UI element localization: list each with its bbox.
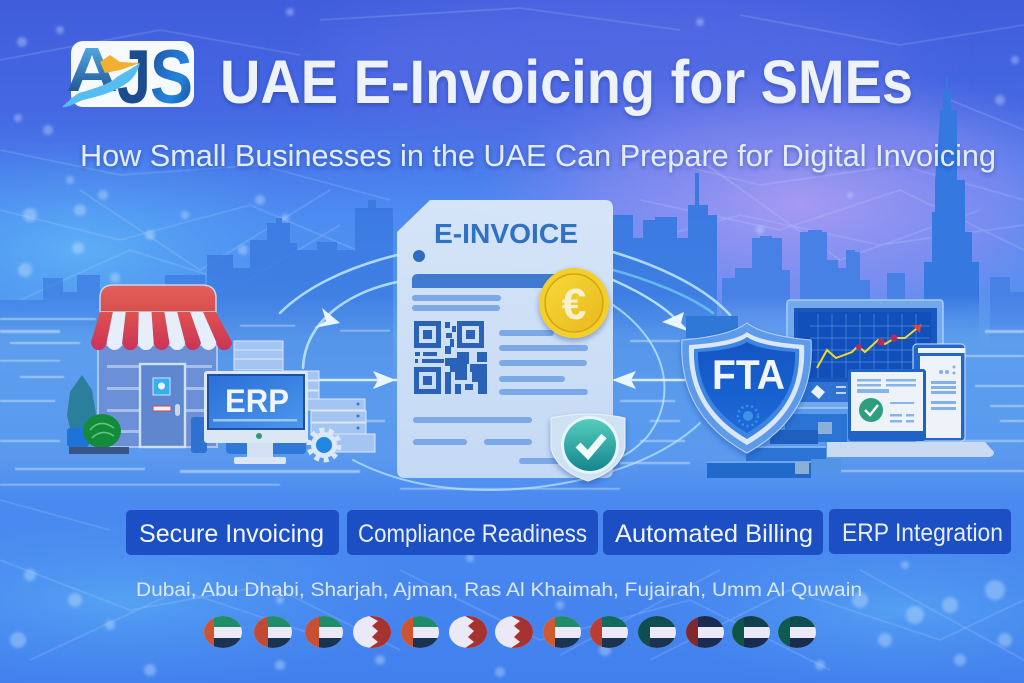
- ERP label: ERP: [225, 383, 289, 419]
- FTA shield: [682, 323, 811, 453]
- laptop base: [827, 442, 994, 457]
- flag row: [204, 616, 816, 648]
- water and ground band: [0, 295, 1024, 500]
- FTA label: FTA: [712, 351, 785, 398]
- tablet: [848, 369, 926, 441]
- button: compliance readiness: [347, 510, 598, 555]
- invoice heading: E-INVOICE: [434, 218, 578, 249]
- flag 1: [204, 616, 242, 648]
- flag 7: [495, 616, 533, 648]
- title: UAE E-Invoicing for SMEs: [220, 48, 913, 116]
- trend line: [817, 325, 921, 368]
- small server behind shield: [686, 316, 738, 338]
- feature buttons: [126, 509, 1011, 555]
- button: ERP integration: ERP Integration: [842, 519, 1003, 547]
- logo letters: AJS: S: [150, 35, 193, 120]
- logo: [62, 35, 194, 120]
- flag 8: [543, 616, 581, 648]
- QR code: [414, 321, 487, 394]
- flag 5: [401, 616, 439, 648]
- flag 3: [305, 616, 343, 648]
- city skyline: [0, 77, 1024, 420]
- large monitor: [787, 300, 943, 408]
- store icon: [67, 285, 232, 454]
- awning stripes: [91, 312, 232, 350]
- invoice document: [397, 200, 613, 478]
- store body: [98, 345, 217, 447]
- round green shrub: [83, 414, 121, 448]
- button: automated billing: [603, 510, 823, 555]
- check shield: [551, 414, 625, 481]
- flag 10: [638, 616, 676, 648]
- ERP monitor: [204, 371, 308, 464]
- logo letters: AJS: J: [117, 35, 151, 120]
- ERP server stacks: [191, 341, 375, 454]
- flag 13: [778, 616, 816, 648]
- store door: [140, 364, 185, 447]
- invoice text lines: [412, 274, 588, 464]
- subtitle: How Small Businesses in the UAE Can Prepare for Digital Invoicing: [80, 138, 996, 173]
- awning roof: [100, 285, 216, 312]
- devices group: [686, 300, 994, 478]
- euro symbol: €: [562, 280, 586, 329]
- flag 6: [449, 616, 487, 648]
- phone: [913, 344, 965, 441]
- server racks: [707, 414, 847, 478]
- emirates list: Dubai, Abu Dhabi, Sharjah, Ajman, Ras Al Khaimah, Fujairah, Umm Al Quwain: [136, 580, 862, 601]
- logo letters: AJS: A: [66, 36, 118, 105]
- flag 11: [686, 616, 724, 648]
- flag 9: [590, 616, 628, 648]
- flag 2: [254, 616, 292, 648]
- building: tower: [924, 77, 979, 350]
- plant: [67, 375, 97, 428]
- flow arcs around the invoice: [280, 252, 730, 490]
- button: secure invoicing: Secure Invoicing: [139, 520, 324, 548]
- button: ERP integration: [829, 509, 1011, 554]
- coin icon: [539, 268, 609, 338]
- button: compliance readiness: Compliance Readiness: [358, 520, 587, 548]
- arrowheads: [314, 308, 690, 389]
- logo letters: AJS: [62, 35, 193, 120]
- button: secure invoicing: [126, 510, 339, 555]
- button: automated billing: Automated Billing: [615, 520, 813, 548]
- flag 4: [353, 616, 391, 648]
- flag 12: [732, 616, 770, 648]
- gear icon: [309, 430, 339, 460]
